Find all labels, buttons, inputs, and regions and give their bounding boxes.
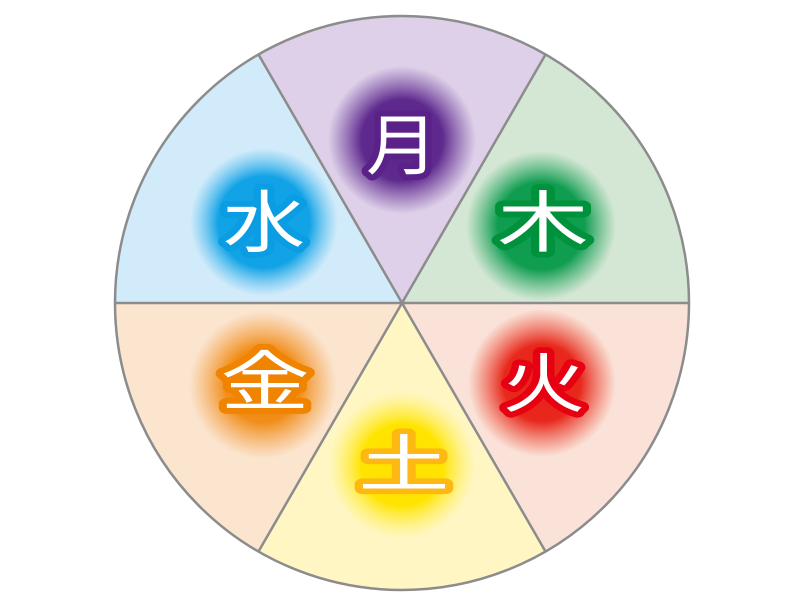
label: water: 水 [223,168,305,266]
label: moon: 月 [366,92,438,188]
label: metal: 金 [220,330,310,423]
label: fire: 火 [503,332,585,425]
label: wood: 木 [497,169,589,265]
label: water: 水 [223,168,305,266]
glow: earth [328,391,476,539]
label: moon: 月 [366,92,438,188]
segment: metal [115,303,402,552]
segment: water [115,54,402,303]
label: earth: 土 [358,415,450,504]
segment: moon [258,16,546,303]
glow: wood [466,151,616,301]
glow: moon [328,66,476,214]
segment: earth [258,303,546,590]
glow: fire [468,309,616,457]
label: wood: 木 [497,169,589,265]
segment: wood [402,54,689,303]
glow: water [190,148,338,296]
label: fire: 火 [503,332,585,425]
label: metal: 金 [220,330,310,423]
glow: metal [189,311,337,459]
segment: fire [402,303,689,552]
wheel outline and dividers [115,16,689,590]
label: earth: 土 [358,415,450,504]
